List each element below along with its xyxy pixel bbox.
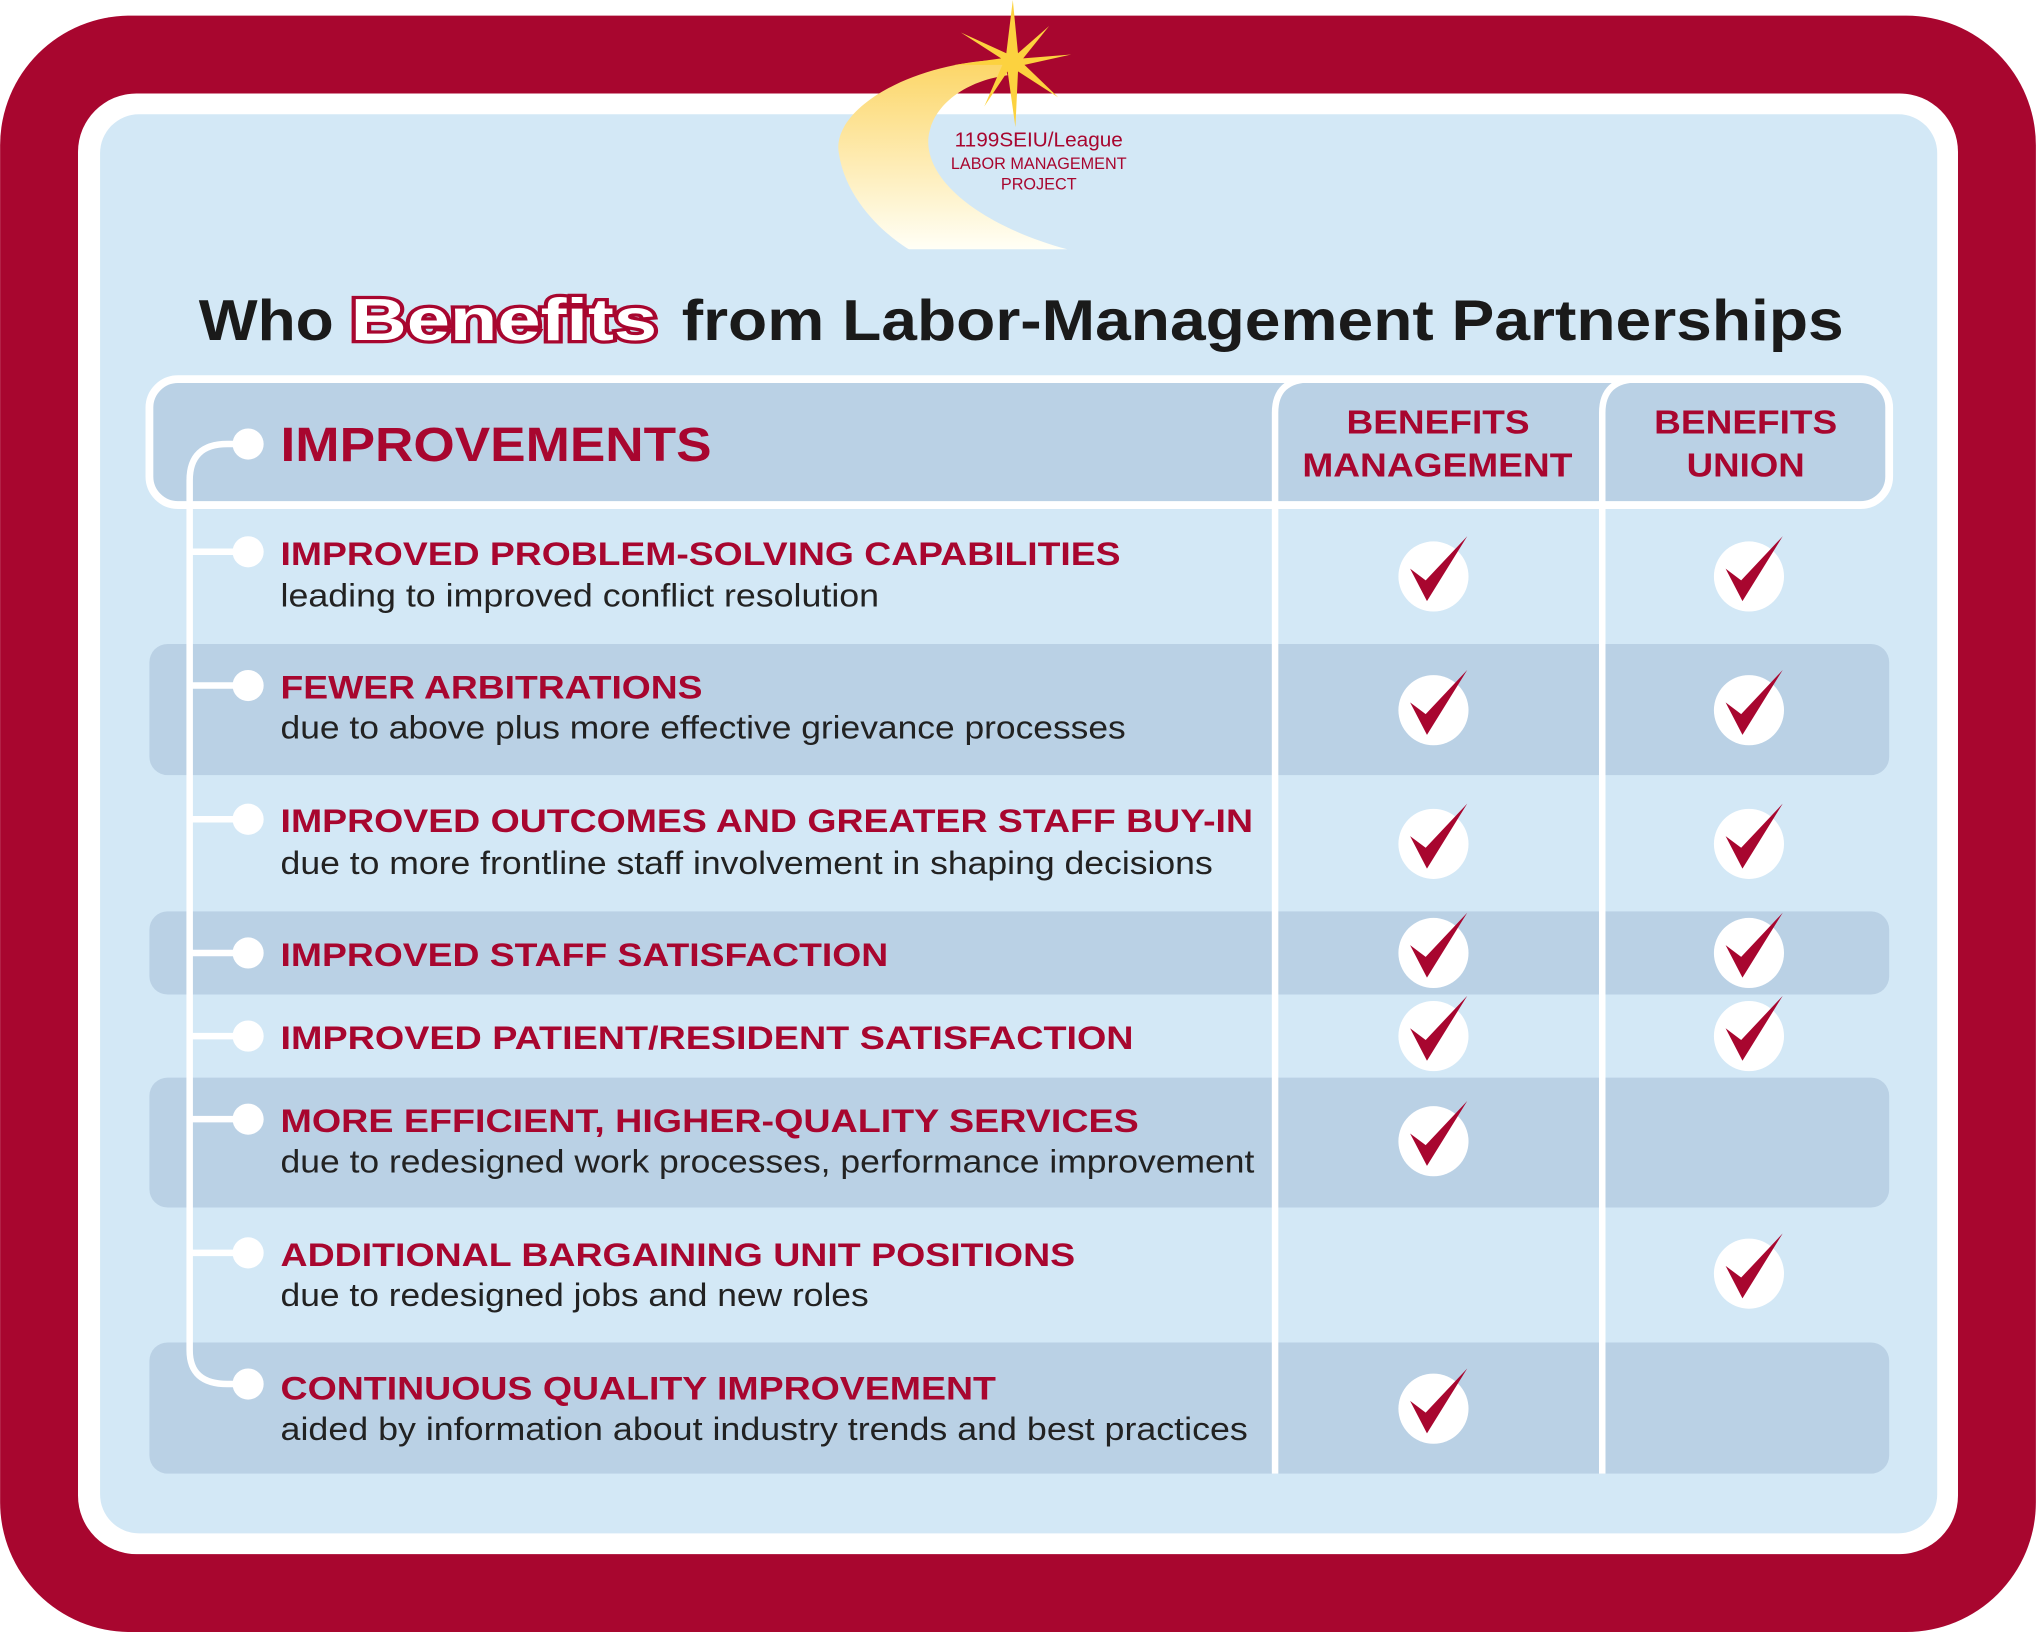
logo: star [954, 0, 1071, 127]
header: benefits management: MANAGEMENT [1302, 446, 1573, 484]
logo text: LABOR MANAGEMENT [951, 155, 1127, 173]
connector line [190, 444, 248, 1384]
header: benefits union [1654, 404, 1837, 484]
header: benefits management: BENEFITS [1346, 404, 1530, 442]
logo text [951, 129, 1127, 194]
logo text: PROJECT [1001, 176, 1077, 194]
header: benefits union: UNION [1687, 446, 1805, 484]
header box [149, 379, 1889, 505]
connector dots [233, 428, 264, 1400]
row headings [281, 536, 1253, 1407]
logo text: 1199SEIU/League [955, 129, 1123, 152]
row descriptions: due to redesigned jobs and new roles [281, 1277, 869, 1313]
table [149, 379, 1889, 1474]
row descriptions: due to more frontline staff involvement in shaping decisions [281, 845, 1213, 881]
row headings: MORE EFFICIENT, HIGHER-QUALITY SERVICES [281, 1103, 1139, 1139]
row headings: ADDITIONAL BARGAINING UNIT POSITIONS [281, 1237, 1075, 1273]
header: benefits union: BENEFITS [1654, 404, 1837, 442]
column dividers [1275, 379, 1639, 1474]
row headings: CONTINUOUS QUALITY IMPROVEMENT [281, 1371, 996, 1407]
row headings: IMPROVED PROBLEM-SOLVING CAPABILITIES [281, 536, 1121, 572]
title: Who [199, 289, 334, 353]
row descriptions: leading to improved conflict resolution [281, 577, 879, 613]
row headings: FEWER ARBITRATIONS [281, 670, 703, 706]
row descriptions [281, 577, 1254, 1447]
header: benefits management [1302, 404, 1573, 484]
title: from Labor-Management Partnerships [682, 289, 1844, 353]
row headings: IMPROVED STAFF SATISFACTION [281, 937, 888, 973]
checkmarks [1398, 536, 1784, 1444]
row descriptions: due to redesigned work processes, performance improvement [281, 1143, 1254, 1179]
row descriptions: aided by information about industry trends and best practices [281, 1411, 1248, 1447]
title: Benefits [351, 286, 657, 353]
row headings: IMPROVED OUTCOMES AND GREATER STAFF BUY-IN [281, 803, 1253, 839]
row headings: IMPROVED PATIENT/RESIDENT SATISFACTION [281, 1020, 1134, 1056]
row descriptions: due to above plus more effective grievance processes [281, 710, 1126, 746]
logo: crescent [838, 60, 1067, 249]
row bands [149, 644, 1889, 775]
title [199, 286, 1844, 353]
logo [838, 0, 1127, 249]
header: improvements: IMPROVEMENTS [281, 419, 712, 472]
light blue panel [100, 114, 1937, 1533]
